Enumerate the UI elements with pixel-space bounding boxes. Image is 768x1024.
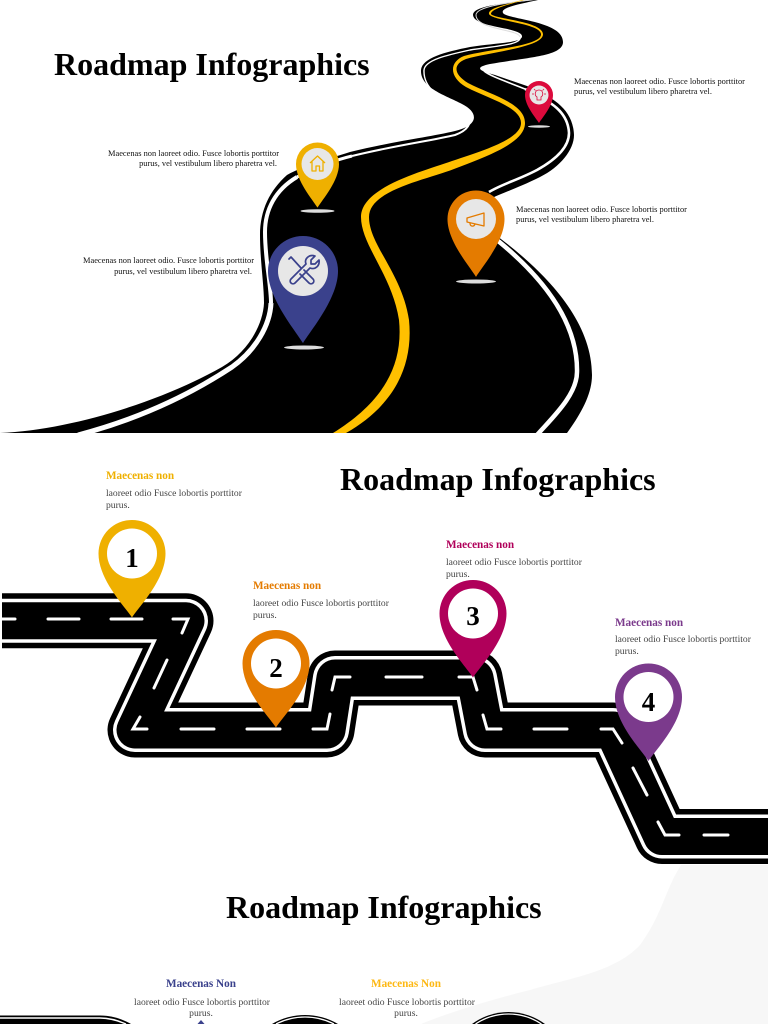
column 2 text: Maecenas Non: [371, 978, 442, 990]
pin: megaphone: [447, 190, 505, 284]
step 3 text: [446, 539, 583, 580]
step 1 text: [106, 470, 243, 511]
pin: bulb: [525, 81, 553, 128]
text: orange pin: [516, 205, 687, 224]
step 2 text: laoreet odio Fusce lobortis porttitor: [253, 598, 390, 609]
step 4 text: Maecenas non: [615, 617, 684, 629]
text: orange pin: Maecenas non laoreet odio. Fusce lobortis porttitor: [516, 205, 687, 214]
text: home pin: purus, vel vestibulum libero pharetra vel.: [139, 159, 277, 168]
column 1 text: Maecenas Non: [166, 978, 237, 990]
pin: tools: [268, 236, 338, 350]
column 1 text: [134, 978, 271, 1019]
step road: [2, 619, 768, 836]
pin 1: 1: [125, 543, 139, 573]
text: tools pin: [83, 256, 254, 276]
text: home pin: [108, 149, 279, 168]
step 1 text: laoreet odio Fusce lobortis porttitor: [106, 488, 243, 499]
column 1 text: laoreet odio Fusce lobortis porttitor: [134, 997, 271, 1008]
background blob: [421, 865, 768, 1024]
pin: home: [296, 142, 339, 213]
step 3 text: laoreet odio Fusce lobortis porttitor: [446, 557, 583, 568]
pin 4: [615, 664, 682, 761]
step 3 text: purus.: [446, 569, 470, 580]
text: top right: purus, vel vestibulum libero pharetra vel.: [574, 87, 712, 96]
title 3: Roadmap Infographics: [226, 889, 542, 925]
pin 3: [440, 580, 506, 678]
title 2: Roadmap Infographics: [340, 461, 656, 497]
step 1 text: purus.: [106, 500, 130, 511]
pin 2: 2: [269, 653, 283, 683]
pin 1: [98, 520, 166, 618]
step 1 text: Maecenas non: [106, 470, 175, 482]
step 2 text: [253, 580, 390, 621]
text: tools pin: purus, vel vestibulum libero pharetra vel.: [114, 267, 252, 276]
step 2 text: purus.: [253, 610, 277, 621]
column 1 text: purus.: [189, 1008, 213, 1019]
title 1: Roadmap Infographics: [54, 46, 370, 82]
step 4 text: purus.: [615, 646, 639, 657]
step 4 text: laoreet odio Fusce lobortis porttitor: [615, 634, 752, 645]
text: tools pin: Maecenas non laoreet odio. Fusce lobortis porttitor: [83, 256, 254, 265]
bottom road fragments: [0, 1012, 545, 1024]
text: top right: Maecenas non laoreet odio. Fusce lobortis porttitor: [574, 77, 745, 86]
text: home pin: Maecenas non laoreet odio. Fusce lobortis porttitor: [108, 149, 279, 158]
pin 4: 4: [642, 687, 655, 717]
step 3 text: Maecenas non: [446, 539, 515, 551]
step 4 text: [615, 617, 752, 657]
column 2 text: purus.: [394, 1008, 418, 1019]
pin 3: 3: [466, 601, 480, 631]
text: top right: [574, 77, 745, 96]
pin tip: [198, 1020, 204, 1024]
step 2 text: Maecenas non: [253, 580, 322, 592]
pin 2: [242, 630, 310, 728]
winding road: [0, 0, 592, 435]
text: orange pin: purus, vel vestibulum libero pharetra vel.: [516, 215, 654, 224]
column 2 text: [339, 978, 476, 1019]
column 2 text: laoreet odio Fusce lobortis porttitor: [339, 997, 476, 1008]
